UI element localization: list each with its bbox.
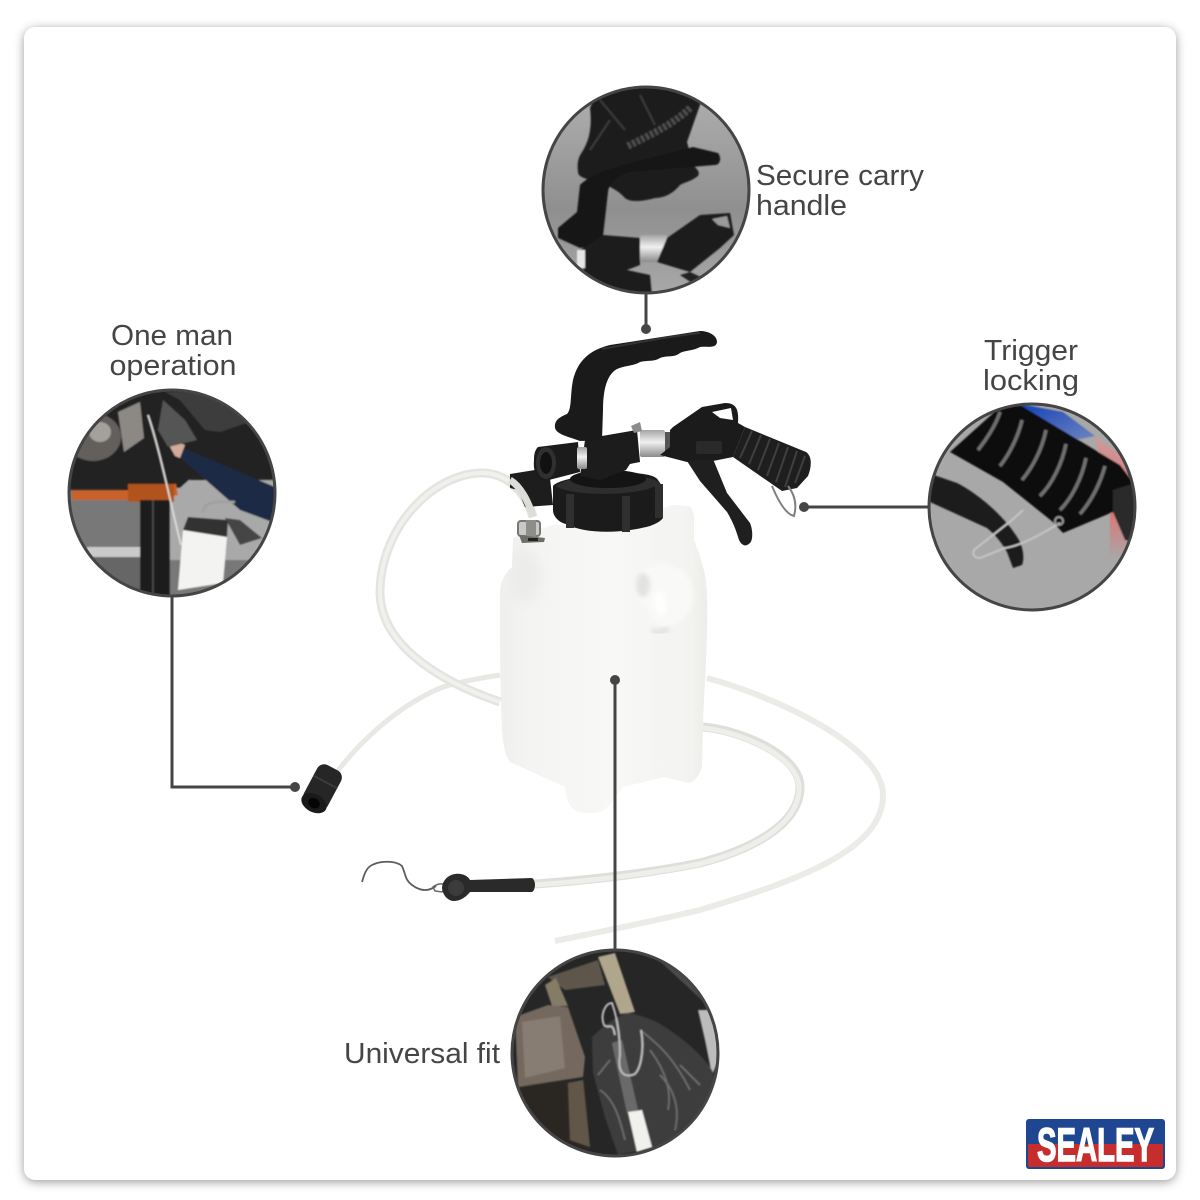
product: white bottle xyxy=(500,505,707,813)
brake pad xyxy=(515,1005,585,1087)
product: carry handle xyxy=(555,331,717,441)
arm xyxy=(175,448,275,523)
callout lines and dots xyxy=(172,292,930,951)
product: rear bracket xyxy=(510,470,553,507)
label: secure carry handle xyxy=(756,160,925,222)
lift post xyxy=(140,500,170,600)
orange lift arm xyxy=(72,484,178,500)
red background xyxy=(1094,436,1130,552)
blue background xyxy=(1020,406,1095,441)
valve body xyxy=(577,235,652,296)
body shading xyxy=(526,564,532,588)
grey nozzle xyxy=(612,1040,638,1113)
product: left connector xyxy=(298,761,345,817)
gloved hand xyxy=(578,85,705,201)
label: one man operation xyxy=(110,320,236,382)
black glove xyxy=(592,1013,714,1155)
label: trigger locking xyxy=(983,335,1079,397)
product: fluid tubes xyxy=(337,473,883,941)
label: one man operation: operation xyxy=(110,350,236,382)
label: trigger locking: locking xyxy=(983,365,1079,397)
grip end connector xyxy=(1112,484,1134,542)
caliper xyxy=(521,1083,588,1147)
car underside xyxy=(117,402,272,489)
label: secure carry handle: handle xyxy=(756,190,847,222)
photo circle: universal fit xyxy=(512,950,725,1156)
photo circle: trigger locking xyxy=(925,403,1145,610)
dark workshop background xyxy=(662,963,707,1010)
product: bleed nipple hook and sleeve xyxy=(362,862,535,901)
bottle in photo xyxy=(178,530,227,590)
photo circle: one man operation xyxy=(68,388,276,598)
tube xyxy=(148,415,181,545)
wire hook xyxy=(603,1003,642,1075)
workshop background xyxy=(70,489,249,594)
glove xyxy=(158,400,197,447)
label: secure carry handle: Secure carry xyxy=(756,160,925,192)
product: trigger gun xyxy=(660,403,811,545)
product: valve body xyxy=(534,422,672,481)
ribbed grip xyxy=(950,405,1133,533)
redraw of tube over bracket xyxy=(510,480,533,517)
gun body xyxy=(657,213,734,272)
photo circle: secure carry handle xyxy=(543,85,749,296)
handle xyxy=(558,147,720,248)
product: screw cap xyxy=(553,470,663,532)
label: one man operation: One man xyxy=(111,320,233,352)
label: trigger locking: Trigger xyxy=(984,335,1078,367)
brake disc xyxy=(77,416,122,462)
trigger xyxy=(925,472,1023,568)
label: universal fit: Universal fit xyxy=(344,1038,500,1070)
beige tube xyxy=(598,953,635,1014)
wire clip xyxy=(973,510,1060,558)
product: tube clamp on bottle xyxy=(518,520,545,543)
moulded knob xyxy=(633,564,693,626)
